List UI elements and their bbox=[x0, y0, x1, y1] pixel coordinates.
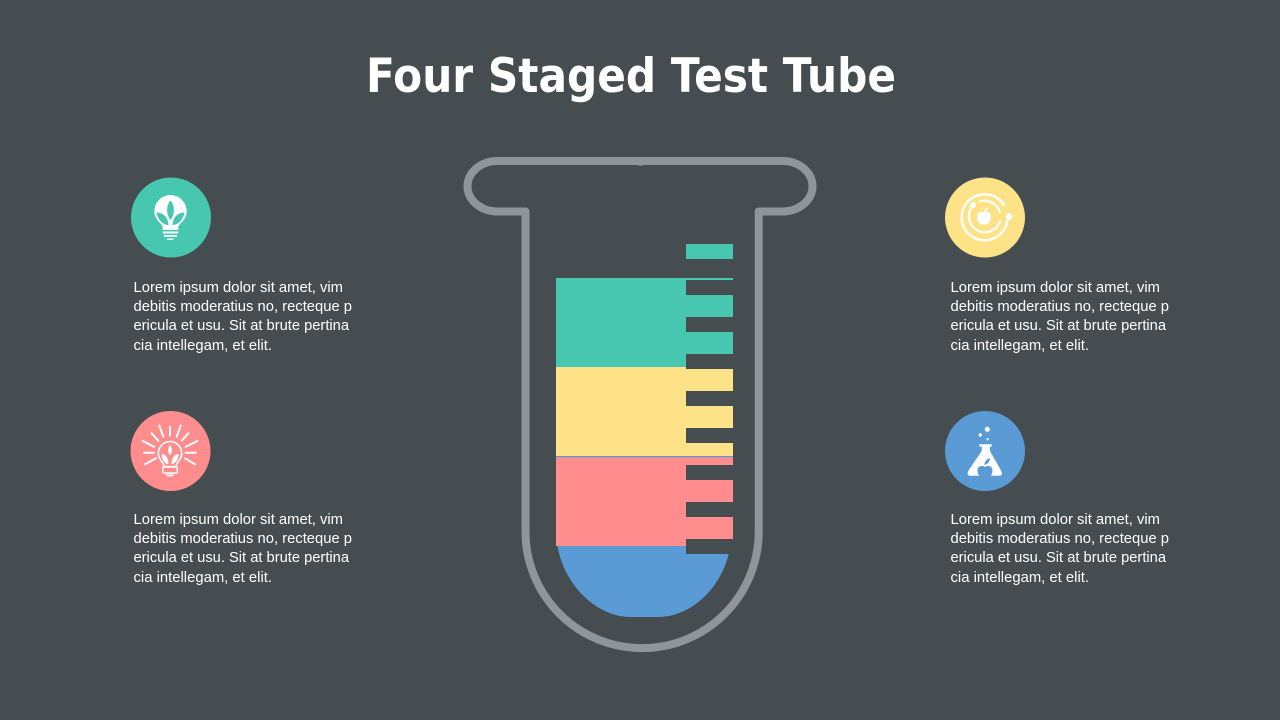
separator line bbox=[556, 456, 733, 457]
panel: pink item bbox=[130, 411, 352, 586]
text block bbox=[950, 280, 1169, 354]
text block: ericula et usu. Sit at brute pertina bbox=[950, 318, 1166, 334]
stage 2: yellow liquid bbox=[556, 367, 733, 456]
icon: flask with apple bbox=[945, 411, 1025, 491]
stage 4: blue liquid bbox=[558, 546, 730, 617]
panel: blue item bbox=[945, 411, 1169, 586]
text block: Lorem ipsum dolor sit amet, vim bbox=[134, 280, 343, 296]
title: Four Staged Test Tube bbox=[366, 49, 896, 104]
text block: cia intellegam, et elit. bbox=[134, 338, 272, 354]
text block: Lorem ipsum dolor sit amet, vim bbox=[950, 512, 1160, 528]
text block: Lorem ipsum dolor sit amet, vim bbox=[134, 512, 343, 528]
text block: cia intellegam, et elit. bbox=[950, 570, 1089, 586]
stage 3: pink liquid bbox=[556, 457, 733, 546]
text block: ericula et usu. Sit at brute pertina bbox=[134, 318, 349, 334]
text block: debitis moderatius no, recteque p bbox=[134, 299, 352, 315]
panel: teal item bbox=[131, 178, 352, 354]
tick gap over blue bbox=[686, 539, 733, 554]
icon: shining bulb bbox=[130, 411, 210, 491]
test tube chart bbox=[468, 158, 812, 648]
stage 1: teal liquid bbox=[556, 278, 733, 367]
text block bbox=[134, 512, 352, 586]
text block bbox=[950, 512, 1169, 586]
text block: cia intellegam, et elit. bbox=[950, 338, 1089, 354]
tube seam bump bbox=[636, 158, 646, 166]
text block: debitis moderatius no, recteque p bbox=[134, 531, 352, 547]
top tick mark bbox=[686, 244, 733, 259]
text block: ericula et usu. Sit at brute pertina bbox=[950, 550, 1166, 566]
panel: yellow item bbox=[945, 178, 1169, 354]
text block bbox=[134, 280, 352, 354]
text block: cia intellegam, et elit. bbox=[134, 570, 272, 586]
text block: debitis moderatius no, recteque p bbox=[950, 299, 1169, 315]
text block: debitis moderatius no, recteque p bbox=[950, 531, 1169, 547]
text block: ericula et usu. Sit at brute pertina bbox=[134, 550, 349, 566]
text block: Lorem ipsum dolor sit amet, vim bbox=[950, 280, 1160, 296]
icon: apple in orbit bbox=[945, 178, 1025, 258]
tube outline bbox=[468, 161, 812, 648]
icon: bulb with leaves bbox=[131, 178, 211, 258]
